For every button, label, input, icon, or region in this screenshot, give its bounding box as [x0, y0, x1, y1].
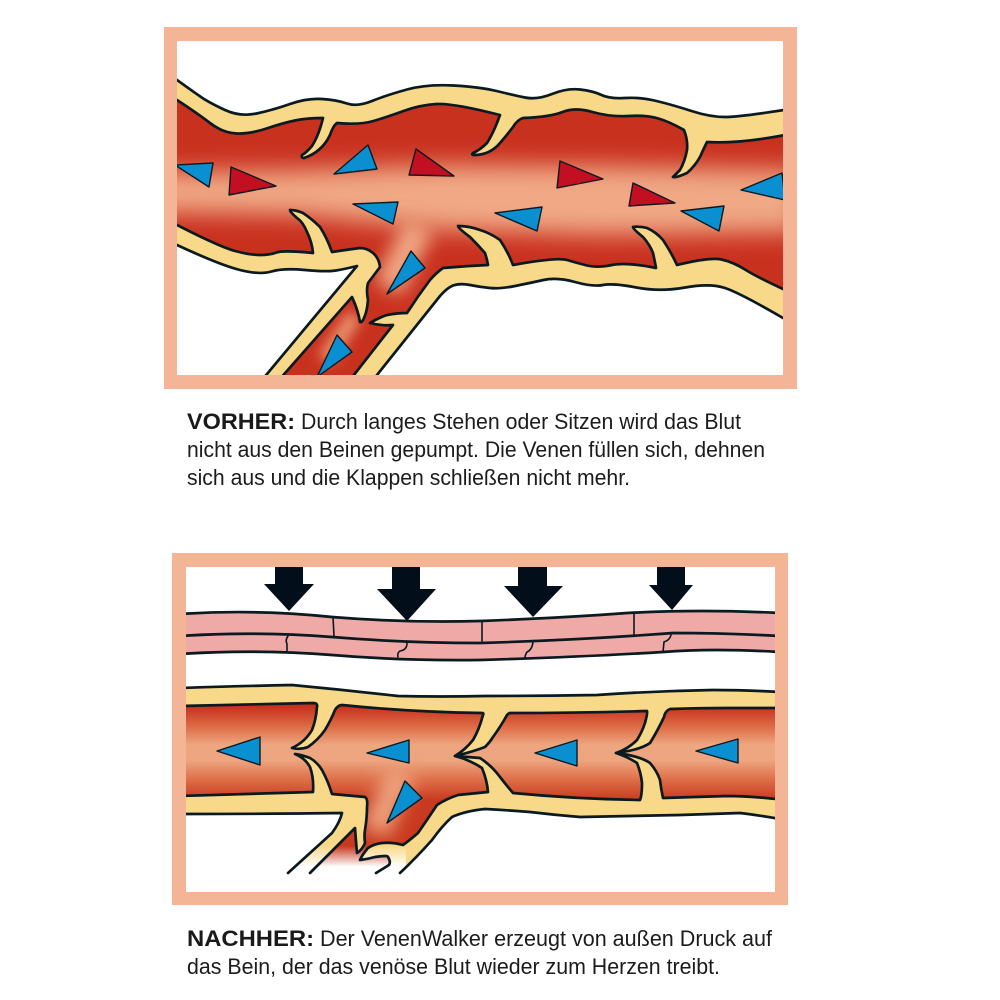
- panel frame: [172, 553, 788, 905]
- blood flow gradient: [186, 704, 775, 866]
- muscle layers: [180, 611, 780, 660]
- vein: compressed with closed valves: [180, 685, 780, 880]
- text: vorher: Durch langes Stehen oder Sitzen wird das Blut: [301, 409, 741, 434]
- vein: dilated with open valves: [177, 78, 783, 375]
- text: vorher: sich aus und die Klappen schließen nicht mehr.: [187, 465, 630, 490]
- blood flow gradient: [177, 102, 783, 375]
- text: vorher: nicht aus den Beinen gepumpt. Die Venen füllen sich, dehnen: [187, 437, 765, 462]
- panel: vorher: [150, 27, 800, 389]
- blue flow triangles: [175, 145, 785, 377]
- text: nachher: [187, 926, 773, 979]
- text: nachher: das Bein, der das venöse Blut wieder zum Herzen treibt.: [187, 954, 720, 979]
- red flow triangles: [229, 149, 675, 206]
- text: nachher: NACHHER:: [187, 926, 314, 951]
- text: nachher: Der VenenWalker erzeugt von außen Druck auf: [320, 926, 773, 951]
- pressure arrows: [264, 567, 693, 620]
- vein outlines: [180, 685, 780, 873]
- blue flow triangles: [217, 737, 738, 823]
- vein inner outline: [170, 96, 790, 380]
- text: vorher: [187, 409, 765, 490]
- branch fade: [290, 847, 406, 873]
- text: vorher: VORHER:: [187, 409, 295, 434]
- panel: nachher: [172, 553, 788, 905]
- panel frame: [164, 27, 797, 389]
